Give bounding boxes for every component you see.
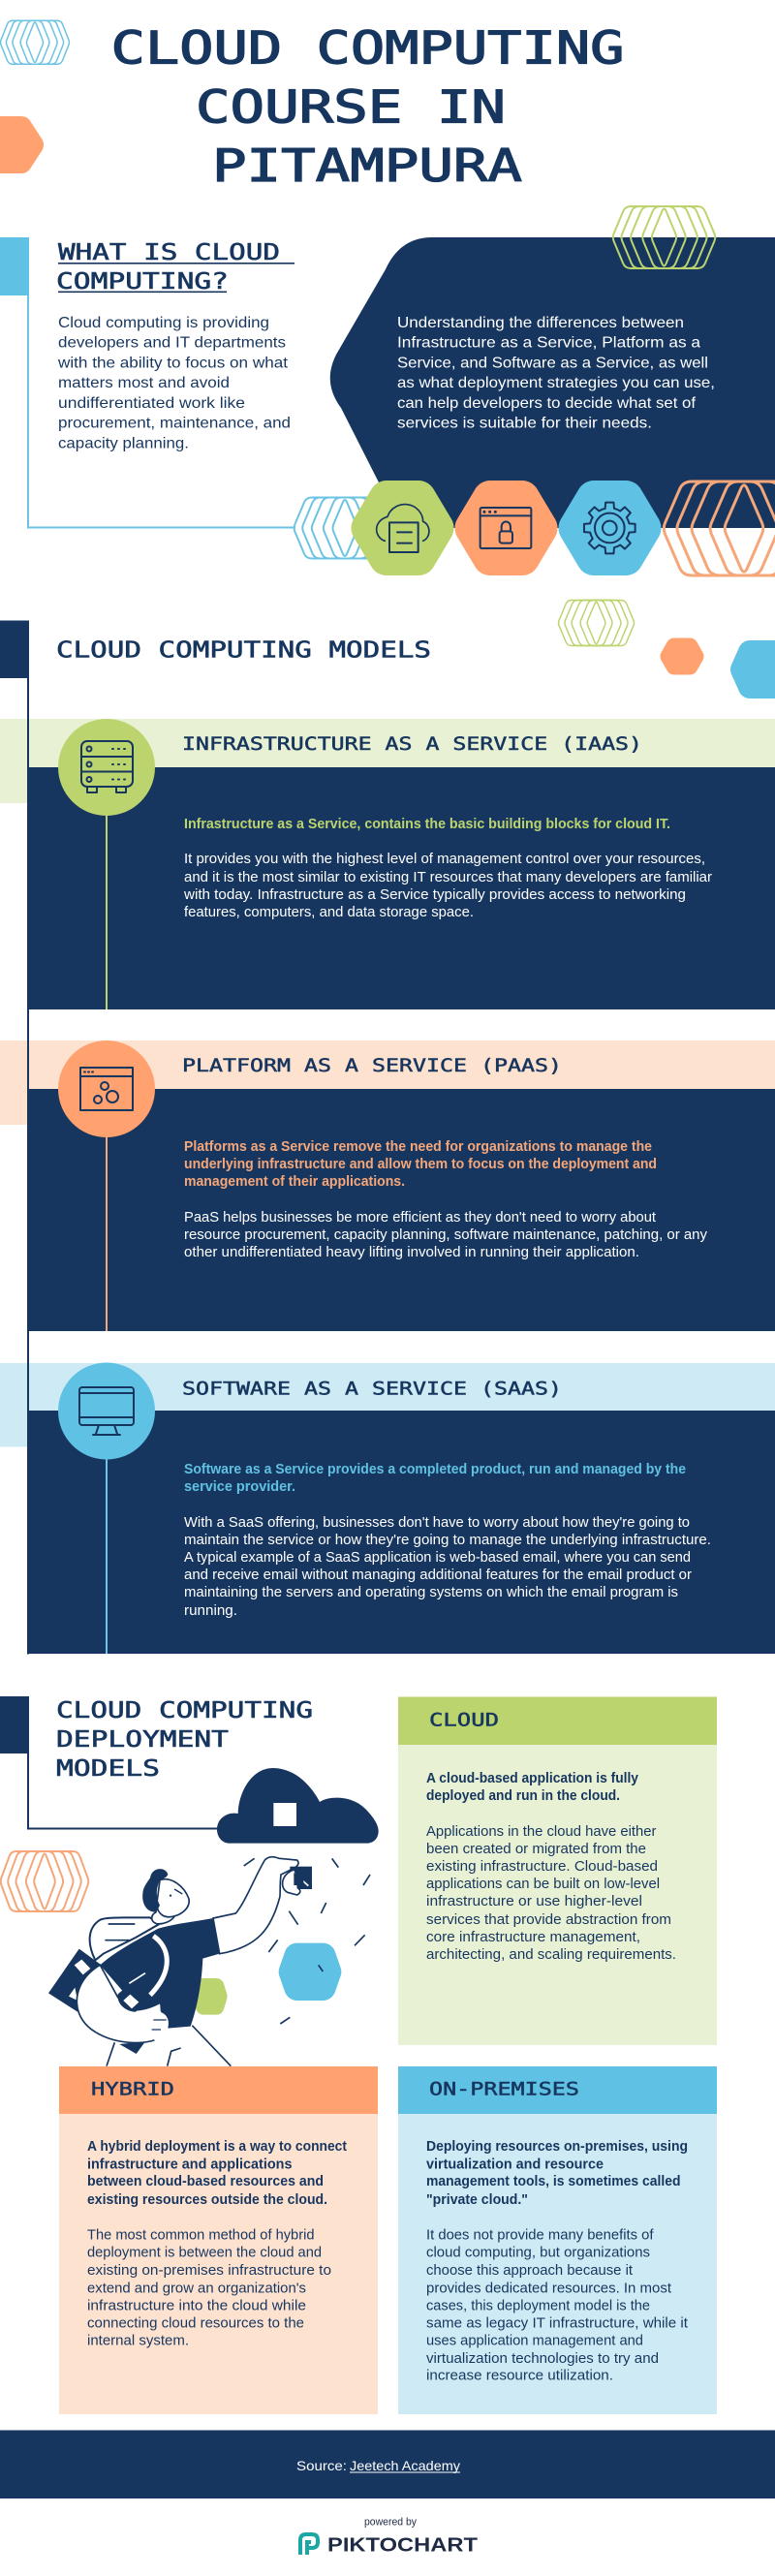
text block: saas description: running.: [184, 1603, 237, 1619]
logo: powered by piktochart: PIKTOCHART: [327, 2534, 478, 2556]
heading: iaas: INFRASTRUCTURE AS A SERVICE (IAAS): [182, 733, 642, 755]
illustration: person placing a block into the cloud: [48, 1768, 379, 2066]
text block: definition: Cloud computing is providing: [58, 315, 269, 331]
text block: cloud lead: [426, 1771, 638, 1804]
title: PITAMPURA: [212, 140, 522, 192]
text block: understanding the differences: can help developers to decide what set of: [397, 395, 697, 412]
decorative icon: teal outlined hexagon set, top left: [1, 20, 69, 64]
text block: definition: developers and IT departments: [58, 335, 286, 351]
decorative icon: blue hexagon: [742, 652, 775, 687]
text block: saas description: A typical example of a SaaS application is web-based email, where you can send: [184, 1550, 691, 1566]
text block: saas description: With a SaaS offering, businesses don't have to worry about how they're going to: [184, 1515, 690, 1531]
text block: cloud description: core infrastructure management,: [426, 1930, 640, 1945]
text block: iaas description: and it is the most similar to existing IT resources that many developers are familiar: [184, 870, 712, 885]
text block: cloud description: existing infrastructure. Cloud-based: [426, 1859, 658, 1875]
text block: on-premises description: cases, this deployment model is the: [426, 2298, 650, 2313]
text block: on-premises description: same as legacy IT infrastructure, while it: [426, 2316, 688, 2332]
icon row: green cloud server hexagon: [368, 498, 436, 558]
text block: on-premises description: [426, 2228, 688, 2384]
left timeline rule: [27, 678, 29, 1655]
text block: definition: procurement, maintenance, and: [58, 415, 291, 432]
text block: paas description: [184, 1210, 708, 1260]
accent tab: cyan block: [0, 237, 29, 295]
text block: on-premises description: virtualization technologies to try and: [426, 2351, 659, 2367]
text block: paas lead: Platforms as a Service remove the need for organizations to manage the: [184, 1139, 652, 1155]
decorative icon: green outlined hexagon set: [613, 206, 715, 268]
icon: cloud server: [377, 505, 429, 552]
heading: cloud computing models: CLOUD COMPUTING MODELS: [56, 638, 431, 664]
panel: what is cloud computing: [0, 237, 295, 527]
heading: cloud computing deployment models: CLOUD COMPUTING: [56, 1698, 313, 1723]
text block: paas description: PaaS helps businesses be more efficient as they don't need to worry about: [184, 1210, 656, 1226]
title: [110, 21, 624, 192]
text block: cloud description: been created or migrated from the: [426, 1842, 646, 1857]
text block: iaas description: with today. Infrastructure as a Service typically provides access to networking: [183, 887, 686, 903]
text block: paas lead: management of their applications.: [184, 1174, 405, 1190]
title: COURSE IN: [196, 81, 506, 134]
decorative icon: blue outlined hexagon set: [294, 498, 395, 558]
text block: hybrid description: deployment is between the cloud and: [87, 2246, 322, 2261]
text block: cloud lead: A cloud-based application is fully: [426, 1771, 638, 1786]
text block: cloud description: [426, 1824, 676, 1963]
decorative icon: small green outlined hexagon set: [559, 601, 634, 645]
text block: on-premises description: It does not provide many benefits of: [426, 2228, 655, 2244]
panel: cloud: [398, 1697, 717, 2045]
heading: what is cloud computing: WHAT IS CLOUD: [58, 240, 280, 265]
text block: on-premises description: provides dedicated resources. In most: [426, 2281, 671, 2297]
text block: on-premises description: increase resource utilization.: [426, 2369, 613, 2384]
icon: server rack in green circle: [58, 719, 155, 816]
text block: saas lead: Software as a Service provides a completed product, run and managed by the: [184, 1462, 686, 1477]
heading: what is cloud computing: COMPUTING?: [56, 269, 229, 295]
decorative icon: orange outlined hexagon set: [664, 481, 775, 575]
heading: cloud computing deployment models: MODELS: [56, 1756, 160, 1782]
icon: monitor in blue circle: [58, 1362, 155, 1459]
text block: hybrid lead: [87, 2139, 347, 2208]
text block: hybrid description: infrastructure into the cloud while: [87, 2298, 306, 2313]
heading: paas: PLATFORM AS A SERVICE (PAAS): [182, 1055, 562, 1076]
icon: cloud: [217, 1768, 379, 1844]
text block: on-premises lead: Deploying resources on-premises, using: [426, 2139, 688, 2155]
heading: cloud computing deployment models: DEPLOYMENT: [56, 1727, 229, 1753]
text block: on-premises lead: management tools, is sometimes called: [426, 2174, 680, 2189]
card header: cloud: CLOUD: [429, 1710, 499, 1731]
icon row: orange window lock hexagon: [473, 498, 541, 558]
panel: platform as a service: [0, 1040, 775, 1331]
text block: cloud description: infrastructure or use higher-level: [426, 1894, 642, 1909]
panel: on-premises: [398, 2066, 717, 2414]
text block: saas description: and receive email without managing additional features for the email product or: [184, 1567, 692, 1583]
decorative icon: orange hexagon, top left: [0, 127, 33, 163]
text block: on-premises description: uses application management and: [426, 2334, 643, 2349]
panel: navy hexagon with differences text: [330, 237, 775, 528]
heading: what is cloud computing: [56, 240, 294, 295]
text block: paas description: resource procurement, capacity planning, software maintenance, patching, or any: [184, 1227, 708, 1243]
text block: saas description: maintaining the servers and operating systems on which the email program is: [184, 1585, 678, 1600]
icon: gear: [584, 503, 636, 553]
text block: definition: matters most and avoid: [58, 375, 230, 391]
text block: understanding the differences: Service, and Software as a Service, as well: [397, 355, 708, 372]
text block: cloud description: Applications in the cloud have either: [426, 1824, 657, 1840]
text block: saas description: [184, 1515, 711, 1619]
text block: hybrid description: [87, 2228, 331, 2349]
text block: cloud description: services that provide abstraction from: [426, 1912, 671, 1928]
text block: definition: [57, 315, 291, 451]
text block: hybrid lead: infrastructure and applications: [87, 2157, 293, 2172]
text block: hybrid description: internal system.: [87, 2334, 189, 2349]
text block: iaas description: features, computers, and data storage space.: [184, 905, 474, 920]
text block: hybrid description: existing on-premises infrastructure to: [87, 2263, 331, 2279]
text block: paas lead: underlying infrastructure and allow them to focus on the deployment and: [184, 1157, 657, 1172]
icon: window with gears in orange circle: [58, 1040, 155, 1137]
text block: hybrid lead: between cloud-based resources and: [87, 2174, 324, 2189]
text block: understanding the differences: [397, 315, 715, 432]
text block: iaas description: [183, 852, 712, 920]
text block: saas lead: service provider.: [184, 1479, 295, 1495]
panel: infrastructure as a service: [0, 719, 775, 1009]
heading: saas: SOFTWARE AS A SERVICE (SAAS): [182, 1378, 562, 1399]
title: CLOUD COMPUTING: [110, 21, 624, 74]
text block: paas lead: [184, 1139, 657, 1190]
text block: hybrid description: extend and grow an organization's: [87, 2281, 306, 2297]
panel: software as a service: [0, 1362, 775, 1654]
card header: hybrid: HYBRID: [91, 2079, 174, 2100]
text block: on-premises description: choose this approach because it: [426, 2263, 633, 2279]
icon: piktochart mark: [300, 2534, 318, 2555]
text block: saas lead: [184, 1462, 686, 1495]
text block: understanding the differences: Understanding the differences between: [397, 315, 684, 331]
logo: powered by piktochart: powered by: [364, 2517, 417, 2529]
text block: paas description: other undifferentiated heavy lifting involved in running their application.: [184, 1245, 639, 1260]
text block: iaas lead: Infrastructure as a Service, contains the basic building blocks for cloud IT.: [184, 817, 670, 832]
text block: hybrid description: connecting cloud resources to the: [87, 2316, 304, 2332]
card header: on-premises: [398, 2066, 717, 2114]
text block: on-premises lead: virtualization and resource: [426, 2157, 604, 2172]
text block: hybrid lead: existing resources outside the cloud.: [87, 2192, 327, 2208]
text block: hybrid description: The most common method of hybrid: [87, 2228, 314, 2244]
text block: definition: undifferentiated work like: [58, 395, 245, 412]
card header: cloud: [398, 1697, 717, 1745]
text block: iaas description: It provides you with the highest level of management control over your resources,: [184, 852, 705, 867]
text block: understanding the differences: services is suitable for their needs.: [397, 415, 652, 432]
footer: source band: [0, 2430, 775, 2498]
icon row: blue gear hexagon: [575, 498, 643, 558]
text block: cloud description: architecting, and scaling requirements.: [426, 1947, 676, 1963]
text block: hybrid lead: A hybrid deployment is a way to connect: [87, 2139, 347, 2155]
footer: source band: Jeetech Academy: [350, 2458, 460, 2473]
text block: cloud lead: deployed and run in the cloud.: [426, 1788, 620, 1804]
panel: hybrid: [59, 2066, 378, 2414]
footer: source band: Source:: [296, 2458, 347, 2473]
text block: definition: with the ability to focus on what: [57, 355, 289, 372]
heading: cloud computing models: [0, 620, 431, 678]
text block: understanding the differences: Infrastructure as a Service, Platform as a: [397, 335, 700, 351]
card header: hybrid: [59, 2066, 378, 2114]
decorative icon: orange outlined hexagon set: [1, 1851, 88, 1911]
text block: understanding the differences: as what deployment strategies you can use,: [397, 375, 715, 391]
text block: on-premises lead: "private cloud.": [426, 2192, 528, 2208]
text block: on-premises lead: [426, 2139, 688, 2208]
heading: cloud computing deployment models: [0, 1696, 313, 1829]
text block: cloud description: applications can be built on low-level: [426, 1877, 660, 1892]
icon: browser window with lock: [480, 508, 531, 548]
logo: powered by piktochart: [300, 2517, 478, 2556]
text block: saas description: maintain the service or how they're going to manage the underlying infrastructure.: [184, 1533, 711, 1548]
text block: on-premises description: cloud computing, but organizations: [426, 2246, 650, 2261]
text block: definition: capacity planning.: [58, 436, 189, 451]
decorative icon: small orange hexagon: [668, 646, 696, 667]
card header: on-premises: ON-PREMISES: [429, 2079, 579, 2100]
